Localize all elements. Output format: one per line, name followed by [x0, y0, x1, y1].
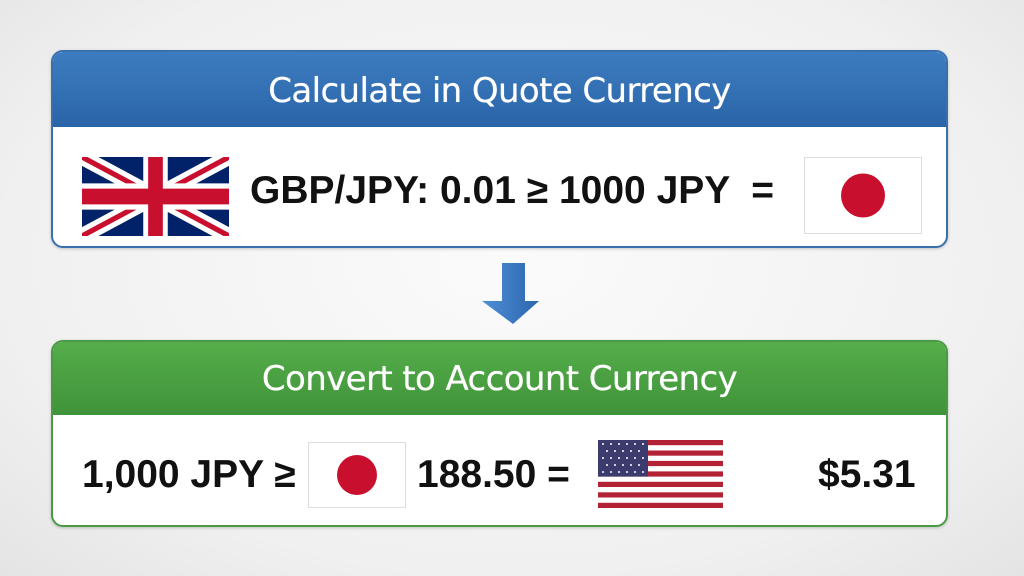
panel: convert to account currency	[51, 340, 948, 527]
panel: calculate in quote currency	[51, 50, 948, 248]
icon: Japan flag	[804, 157, 922, 234]
heading: convert to account currency: Convert to Account Currency	[262, 359, 737, 399]
text: 1,000 JPY: 1,000 JPY ≥	[82, 453, 296, 496]
text: GBP/JPY equation: GBP/JPY: 0.01 ≥ 1000 JPY =	[250, 169, 774, 212]
text: $5.31 result: $5.31	[818, 453, 916, 496]
arrow: down	[482, 263, 539, 324]
icon: Japan flag small	[308, 442, 406, 508]
heading: convert to account currency	[53, 342, 946, 415]
heading: calculate in quote currency	[53, 52, 946, 127]
icon: US flag	[598, 440, 723, 508]
icon: UK flag	[82, 157, 229, 236]
heading: calculate in quote currency: Calculate in Quote Currency	[268, 71, 731, 111]
text: 188.50 =: 188.50 =	[417, 453, 570, 496]
